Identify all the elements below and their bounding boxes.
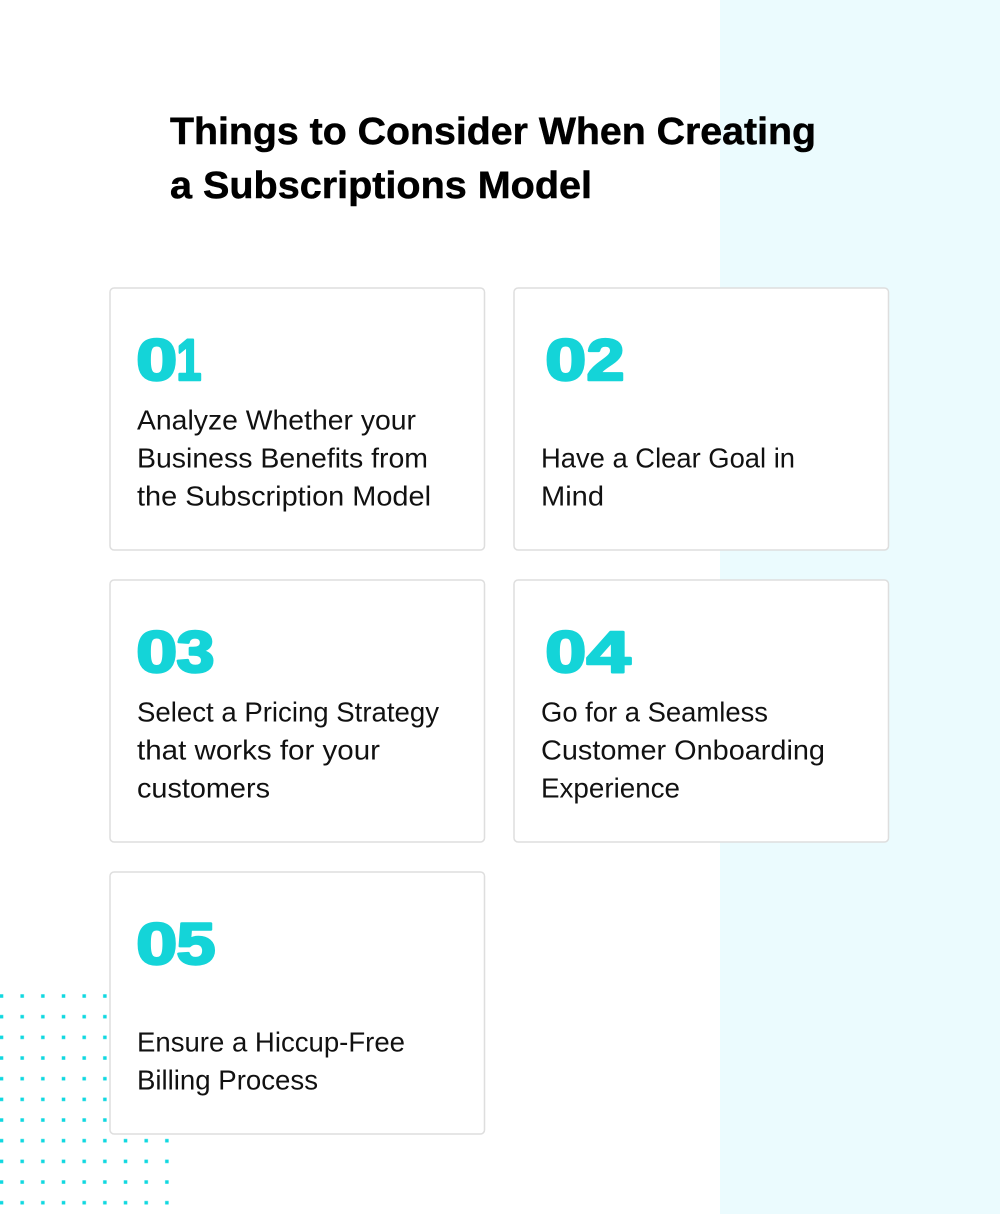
- card 02 text: Have a Clear Goal in: [541, 442, 795, 474]
- card 03 text: customers: [137, 772, 270, 804]
- number 03: [136, 620, 214, 685]
- number 04: 0: [545, 620, 586, 685]
- card 05 text: [137, 1026, 405, 1096]
- card 03 text: Select a Pricing Strategy: [137, 696, 439, 728]
- number 03: 0: [136, 620, 177, 685]
- card 03 text: [137, 696, 439, 804]
- card 05 text: Billing Process: [137, 1064, 318, 1096]
- title: a Subscriptions Model: [170, 165, 592, 207]
- number 04: [545, 620, 631, 685]
- title: [170, 111, 816, 207]
- card 01 text: Business Benefits from: [137, 442, 428, 474]
- panel: card 03: [110, 580, 484, 842]
- number 02: 2: [586, 328, 624, 393]
- panel: card 02: [514, 288, 888, 550]
- number 03: 3: [176, 620, 214, 685]
- card 04 text: Customer Onboarding: [541, 734, 825, 766]
- dot pattern: [0, 986, 177, 1214]
- card 01 text: [137, 404, 431, 512]
- card 04 text: Experience: [541, 772, 680, 804]
- card 05 text: Ensure a Hiccup-Free: [137, 1026, 405, 1058]
- number 05: 0: [136, 912, 177, 977]
- number 01: 0: [136, 328, 177, 393]
- card 02 text: [541, 442, 795, 512]
- number 02: 0: [545, 328, 586, 393]
- panel: card 04: [514, 580, 888, 842]
- light cyan background panel: [720, 0, 1000, 1214]
- number 02: [545, 328, 624, 393]
- card 02 text: Mind: [541, 480, 604, 512]
- card 04 text: Go for a Seamless: [541, 696, 768, 728]
- panel: card 05: [110, 872, 484, 1134]
- number 04: 4: [587, 620, 631, 685]
- panel: card 01: [110, 288, 484, 550]
- number 05: [136, 912, 216, 977]
- card 01 text: Analyze Whether your: [137, 404, 416, 436]
- number 05: 5: [176, 912, 216, 977]
- card 04 text: [541, 696, 825, 804]
- title: Things to Consider When Creating: [170, 111, 816, 153]
- card 03 text: that works for your: [137, 734, 380, 766]
- number 01: [136, 328, 202, 393]
- card 01 text: the Subscription Model: [137, 480, 431, 512]
- number 01: 1: [176, 328, 202, 393]
